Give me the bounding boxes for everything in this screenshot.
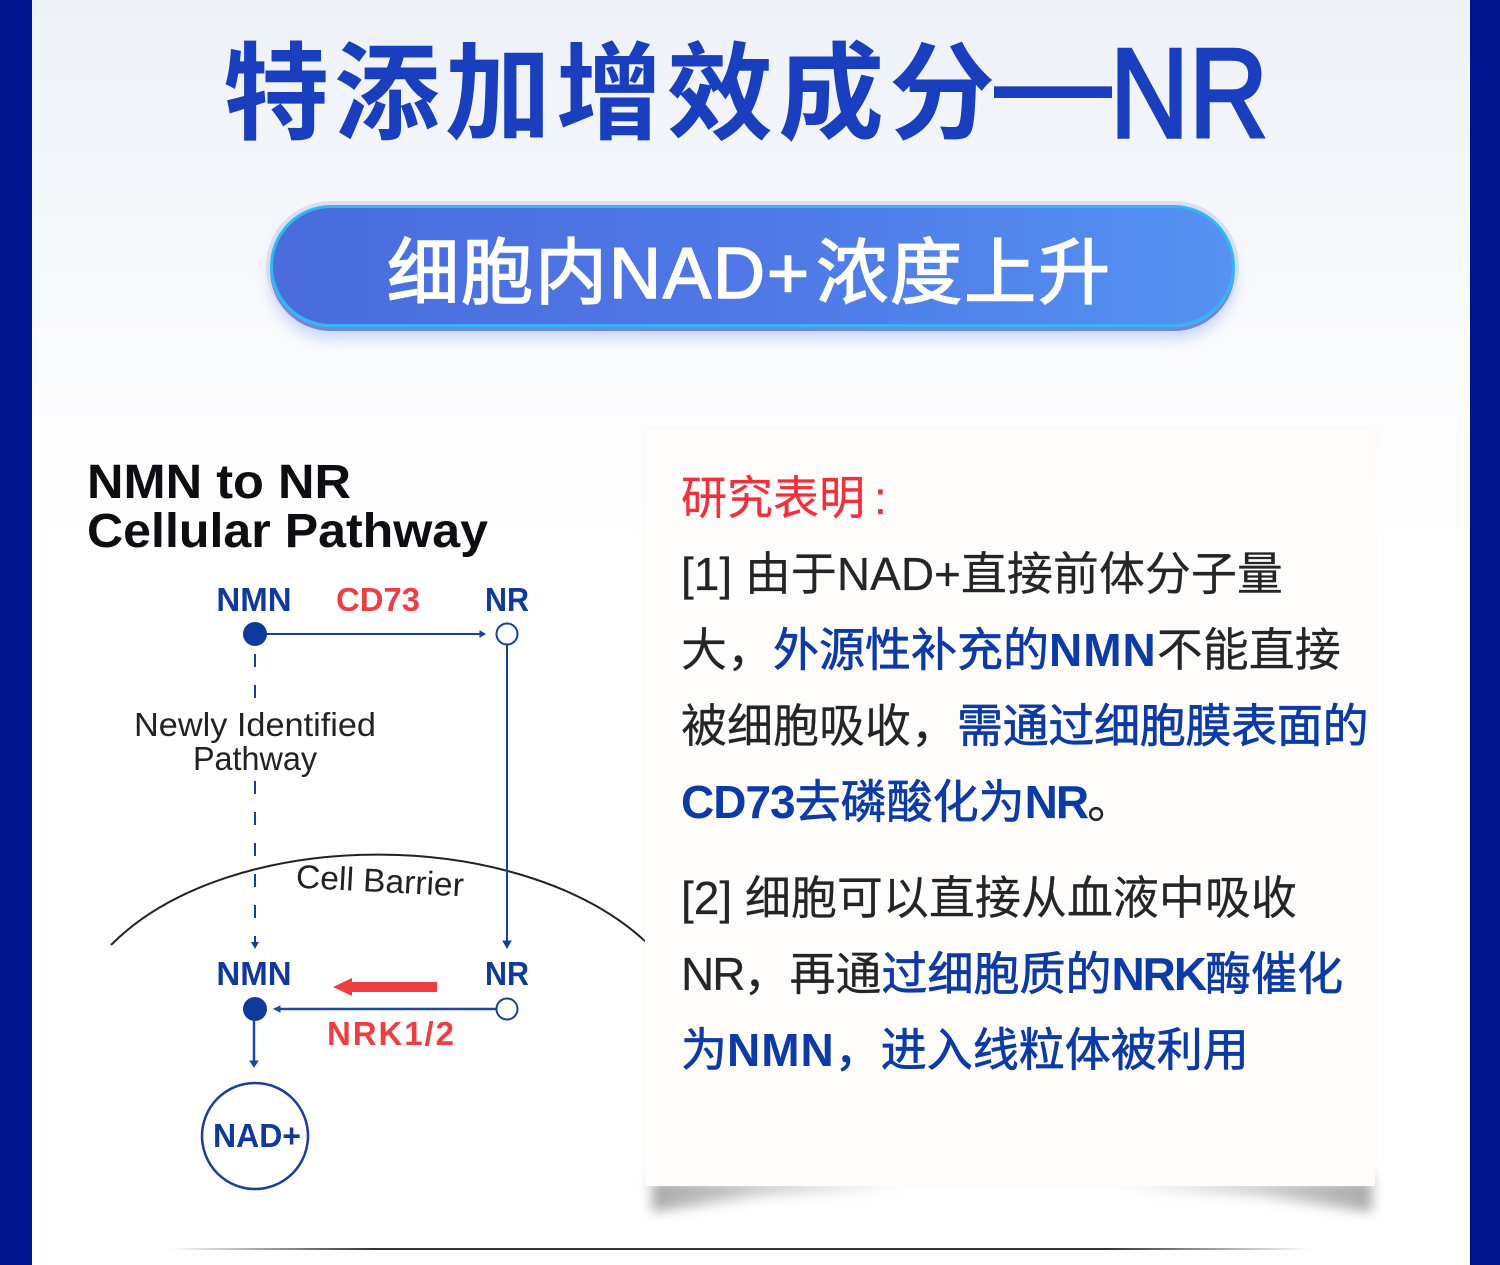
bottom NMN dot xyxy=(243,997,267,1021)
subtitle pill: 细胞内NAD+浓度上升 xyxy=(387,234,1112,314)
title: — xyxy=(996,20,1110,146)
paragraph 2: [2] 细胞可以直接从血液中吸收 xyxy=(681,872,1297,924)
diagram title: Cellular Pathway xyxy=(87,505,488,558)
enzyme labels: NRK1/2 xyxy=(327,1015,454,1052)
paragraph 1: CD73去磷酸化为NR。 xyxy=(681,776,1133,828)
left border xyxy=(0,0,32,1265)
node labels: NMN xyxy=(216,955,292,992)
bottom NR ring xyxy=(496,998,518,1020)
dashed arrowhead xyxy=(251,942,259,949)
NAD+ circle xyxy=(202,1083,308,1189)
right border xyxy=(1470,0,1500,1265)
node labels: NR xyxy=(485,955,529,992)
diagram title xyxy=(87,456,488,558)
title: NR xyxy=(1110,22,1268,160)
title xyxy=(223,20,1268,160)
panel: research text xyxy=(645,430,1375,1186)
newly identified label xyxy=(134,706,376,777)
top arrow NMN to NR xyxy=(255,631,485,637)
paragraph 1: 大，外源性补充的NMN不能直接 xyxy=(681,624,1341,676)
newly identified label: Pathway xyxy=(193,740,317,777)
arrow down to NAD+ xyxy=(250,1020,258,1067)
pathway diagram xyxy=(87,456,645,1190)
paragraph 1 xyxy=(681,548,1368,828)
enzyme labels: CD73 xyxy=(336,581,420,618)
red arrow xyxy=(333,978,437,996)
paragraph 2: 为NMN，进入线粒体被利用 xyxy=(681,1024,1249,1076)
newly identified label: Newly Identified xyxy=(134,706,376,743)
top NMN dot xyxy=(243,622,267,646)
enzyme labels xyxy=(327,581,454,1052)
NR vertical arrow xyxy=(503,645,511,948)
bottom rule xyxy=(170,1248,1310,1250)
paragraph 1: 被细胞吸收，需通过细胞膜表面的 xyxy=(681,700,1368,752)
panel shadow: curled corners xyxy=(644,1176,1380,1218)
bottom arrow NR to NMN xyxy=(274,1006,497,1012)
cell barrier label: Cell Barrier xyxy=(295,858,465,903)
cell barrier curve xyxy=(111,855,646,945)
node labels: NMN xyxy=(216,581,292,618)
node labels: NR xyxy=(485,581,529,618)
subtitle pill xyxy=(270,205,1235,327)
diagram title: NMN to NR xyxy=(87,456,351,509)
paragraph 1: [1] 由于NAD+直接前体分子量 xyxy=(681,548,1283,600)
NAD+ circle: NAD+ xyxy=(213,1117,301,1154)
title: 特添加增效成分 xyxy=(223,36,1000,154)
node labels xyxy=(216,581,529,992)
research heading: 研究表明: xyxy=(681,472,887,524)
paragraph 2: NR，再通过细胞质的NRK酶催化 xyxy=(681,948,1343,1000)
top NR ring xyxy=(496,624,518,644)
dashed newly identified pathway xyxy=(254,654,256,942)
